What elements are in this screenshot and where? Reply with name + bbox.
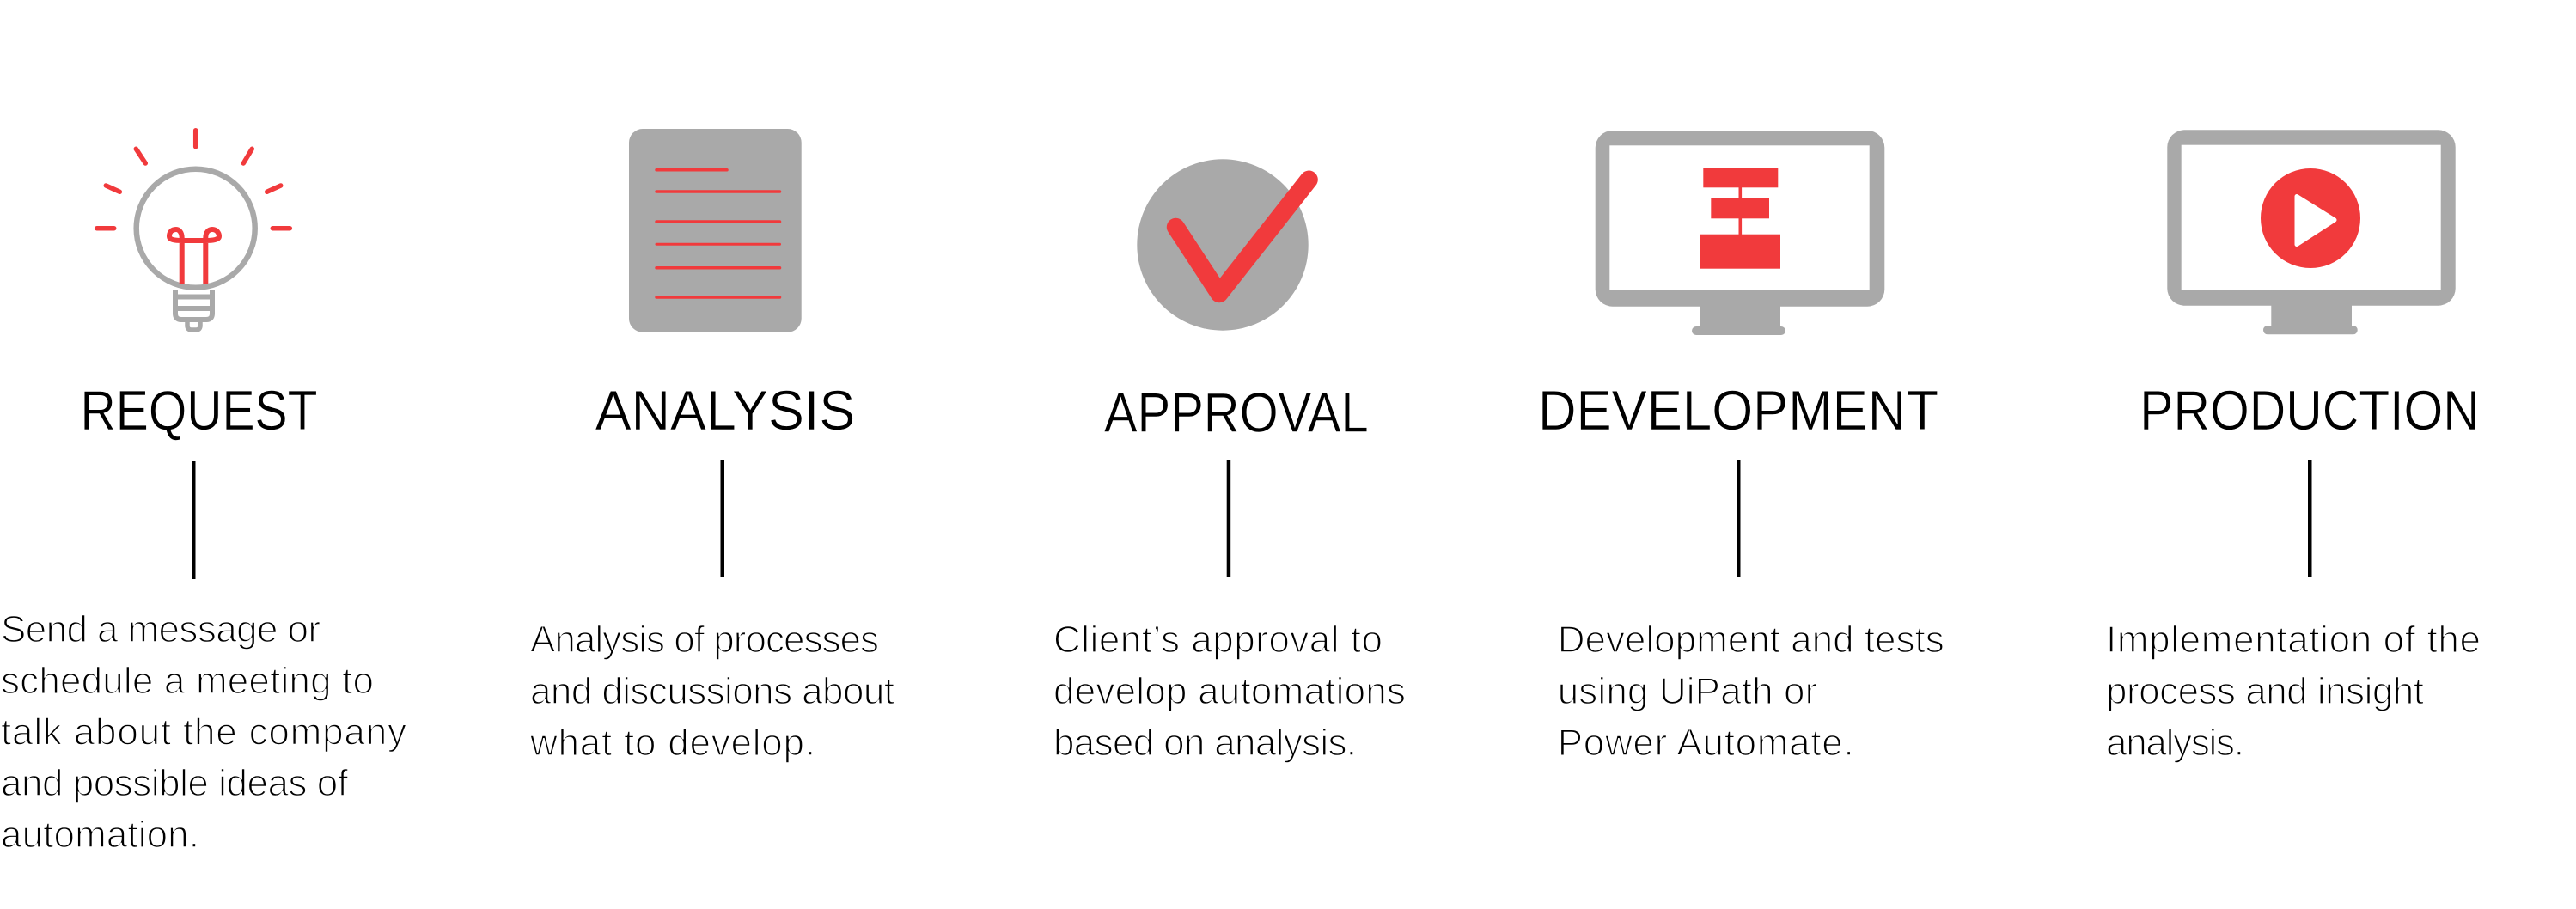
text block: development description: Development and tests xyxy=(1558,619,1944,661)
text block: production description: process and insight xyxy=(2106,670,2424,712)
text block: development description xyxy=(1558,619,1944,764)
panel: development xyxy=(1538,131,1944,764)
heading: approval: APPROVAL xyxy=(1104,381,1369,443)
icon: monitor with flowchart xyxy=(1596,131,1884,335)
heading: analysis: ANALYSIS xyxy=(595,379,855,442)
text block: request description: automation. xyxy=(1,814,199,856)
text block: request description xyxy=(1,608,406,856)
panel: request xyxy=(1,131,406,856)
panel: approval xyxy=(1053,159,1406,764)
icon: light bulb xyxy=(97,131,290,330)
text block: request description: schedule a meeting to xyxy=(1,660,374,702)
text block: approval description: Client’s approval to xyxy=(1053,619,1383,661)
connector line xyxy=(1227,460,1230,577)
connector line xyxy=(2308,460,2311,577)
text block: request description: Send a message or xyxy=(1,608,320,650)
text block: development description: Power Automate. xyxy=(1558,722,1854,764)
heading: production: PRODUCTION xyxy=(2140,379,2480,442)
text block: analysis description: Analysis of processes xyxy=(530,619,879,661)
panel: production xyxy=(2106,130,2481,764)
text block: analysis description xyxy=(529,619,894,764)
heading: request: REQUEST xyxy=(81,379,318,442)
connector line xyxy=(720,460,724,577)
text block: request description: and possible ideas of xyxy=(1,762,349,804)
text block: development description: using UiPath or xyxy=(1558,670,1817,712)
icon: document xyxy=(629,129,802,332)
text block: approval description: based on analysis. xyxy=(1053,722,1357,764)
connector line xyxy=(1737,460,1741,577)
text block: production description: Implementation of the xyxy=(2106,619,2481,661)
heading: development: DEVELOPMENT xyxy=(1538,379,1938,442)
panel: analysis xyxy=(529,129,894,764)
connector line xyxy=(192,461,196,579)
text block: request description: talk about the company xyxy=(1,711,406,753)
icon: monitor with play button xyxy=(2167,130,2456,334)
text block: approval description: develop automations xyxy=(1053,670,1406,712)
text block: analysis description: and discussions about xyxy=(530,670,894,712)
text block: approval description xyxy=(1053,619,1406,764)
icon: check mark in circle xyxy=(1137,159,1309,331)
text block: analysis description: what to develop. xyxy=(529,722,815,764)
text block: production description xyxy=(2106,619,2481,764)
text block: production description: analysis. xyxy=(2106,722,2244,764)
